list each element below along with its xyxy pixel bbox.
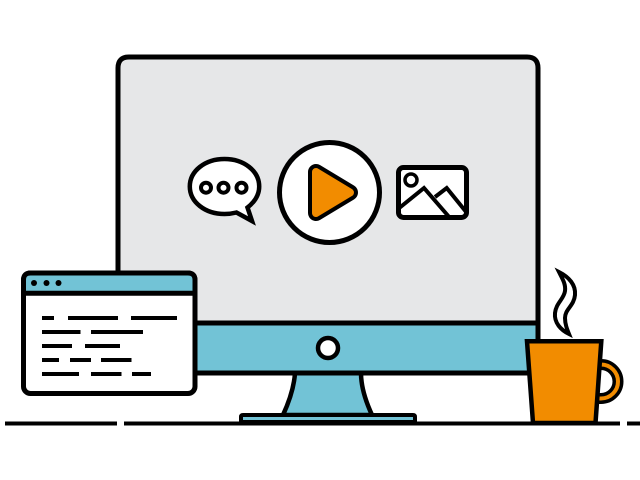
steam xyxy=(555,272,575,334)
monitor chin xyxy=(118,323,538,373)
window body xyxy=(24,273,195,394)
window text lines xyxy=(42,318,177,374)
power button xyxy=(318,338,338,358)
monitor screen xyxy=(118,57,538,323)
cup handle xyxy=(594,364,618,398)
icon: image picture xyxy=(398,168,467,218)
browser window xyxy=(24,273,195,394)
monitor base xyxy=(241,415,415,422)
icon: speech bubble xyxy=(190,159,259,221)
ground line xyxy=(5,422,640,426)
cup body xyxy=(527,341,601,423)
monitor stand xyxy=(283,373,372,415)
window dots xyxy=(31,280,62,286)
window title bar xyxy=(24,273,195,293)
coffee cup xyxy=(527,341,618,423)
monitor xyxy=(118,57,538,422)
icon: play button xyxy=(280,142,380,242)
